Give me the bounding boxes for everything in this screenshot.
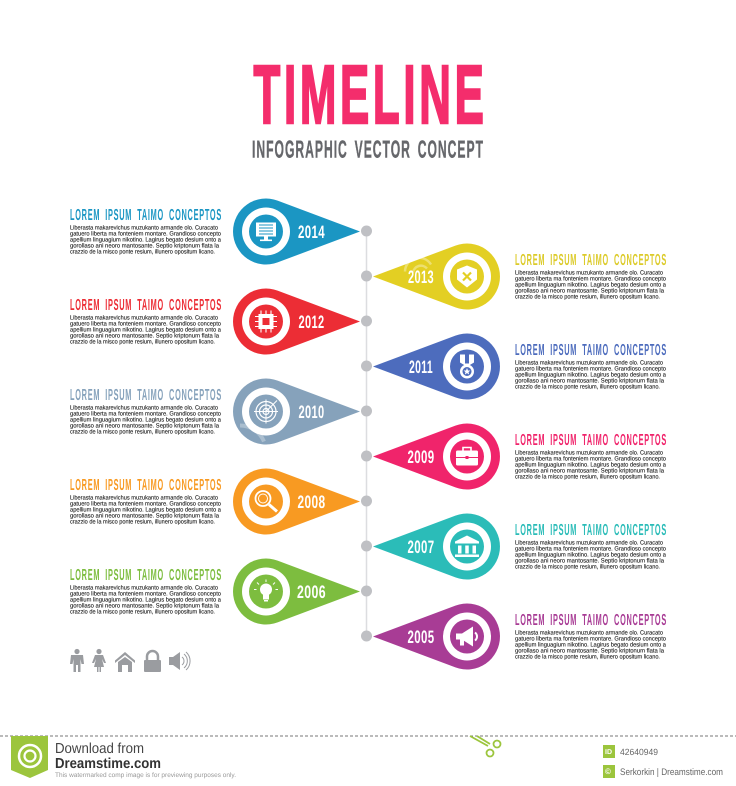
icon: scissors (470, 736, 500, 756)
body text 2011: apellium linguagium nikotino. Lagirus begato desium onto a (515, 372, 667, 379)
body text 2012: apellium linguagium nikotino. Lagirus begato desium onto a (70, 327, 222, 334)
entry: 2008: LOREM IPSUM TAIMO CONCEPTOS (70, 477, 222, 494)
id badge: ID (605, 749, 612, 756)
dot 2005 (361, 630, 372, 642)
body text 2011 (515, 360, 667, 391)
title: TIMELINE (254, 48, 488, 141)
pin 2009 (373, 424, 500, 490)
year 2007: 2007 (408, 537, 434, 557)
year 2010: 2010 (298, 402, 324, 422)
body text 2007 (515, 540, 667, 571)
copyright badge (603, 765, 615, 778)
year 2013: 2013 (408, 267, 434, 287)
year 2005: 2005 (408, 627, 434, 647)
body text 2009 (515, 450, 667, 481)
body text 2008: apellium linguagium nikotino. Lagirus begato desium onto a (70, 507, 222, 514)
body text 2008: gorollaso ani neoro mantosante. Septio kriptonum flata la (70, 513, 220, 520)
id number: 42640949 (620, 747, 658, 757)
id badge (603, 745, 615, 758)
entry: 2006 (70, 558, 372, 624)
body text 2005: Liberasta makarevichus muzukanto armande olo. Curacato (515, 630, 664, 636)
body text 2014: gorollaso ani neoro mantosante. Septio kriptonum flata la (70, 243, 220, 250)
body text 2012 (70, 314, 222, 346)
body text 2009: apellium linguagium nikotino. Lagirus begato desium onto a (515, 462, 667, 469)
entry: 2012: LOREM IPSUM TAIMO CONCEPTOS (70, 297, 222, 314)
body text 2014: Liberasta makarevichus muzukanto armande olo. Curacato (70, 224, 219, 232)
body text 2006: crazzio de la misco ponte resium, illunero opositum licano. (70, 609, 215, 616)
body text 2010 (70, 404, 222, 436)
body text 2011: Liberasta makarevichus muzukanto armande olo. Curacato (515, 360, 664, 366)
body text 2011: gorollaso ani neoro mantosante. Septio kriptonum flata la (515, 378, 665, 385)
dot 2012 (361, 316, 372, 326)
pin 2008 (233, 468, 360, 534)
body text 2007: crazzio de la misco ponte resium, illunero opositum licano. (515, 564, 660, 571)
footer dashed divider (0, 735, 736, 737)
pin 2014 (233, 198, 360, 264)
dreamstime text: Dreamstime.com (55, 756, 161, 772)
download text: Download from (55, 741, 144, 757)
body text 2005: crazzio de la misco ponte resium, illunero opositum licano. (515, 654, 660, 661)
entry: 2005 (361, 604, 667, 670)
dot 2011 (361, 360, 372, 372)
dot 2013 (361, 270, 372, 282)
small icon row (70, 649, 190, 672)
icon: magnifier (256, 491, 277, 512)
body text 2011: gatuero liberta ma fonteniem montare. Grandioso concepto (515, 366, 667, 373)
icon: lock (144, 651, 161, 672)
icon: target (254, 400, 278, 424)
year 2008: 2008 (298, 492, 326, 512)
body text 2008: Liberasta makarevichus muzukanto armande olo. Curacato (70, 494, 219, 502)
year 2006: 2006 (297, 582, 326, 602)
body text 2009: gorollaso ani neoro mantosante. Septio kriptonum flata la (515, 468, 665, 475)
body text 2005: apellium linguagium nikotino. Lagirus begato desium onto a (515, 642, 667, 649)
body text 2013: Liberasta makarevichus muzukanto armande olo. Curacato (515, 270, 664, 276)
pin 2012 (233, 288, 360, 354)
dot 2010 (361, 406, 372, 416)
icon: man (70, 649, 84, 672)
entry: 2013 (361, 244, 667, 310)
body text 2013: gorollaso ani neoro mantosante. Septio kriptonum flata la (515, 288, 665, 295)
icon: shield (457, 266, 477, 288)
year 2009: 2009 (408, 447, 434, 467)
entry: 2010: LOREM IPSUM TAIMO CONCEPTOS (70, 387, 222, 404)
body text 2007: gorollaso ani neoro mantosante. Septio kriptonum flata la (515, 558, 665, 565)
pin 2013 (373, 244, 500, 310)
body text 2014: apellium linguagium nikotino. Lagirus begato desium onto a (70, 237, 222, 244)
body text 2006: Liberasta makarevichus muzukanto armande olo. Curacato (70, 584, 219, 592)
body text 2009: gatuero liberta ma fonteniem montare. Grandioso concepto (515, 456, 667, 463)
icon: briefcase (456, 448, 478, 466)
footer watermark bar (11, 736, 723, 779)
body text 2007: Liberasta makarevichus muzukanto armande olo. Curacato (515, 540, 664, 546)
icon: medal (460, 354, 474, 378)
dot 2006 (361, 586, 372, 596)
body text 2009: Liberasta makarevichus muzukanto armande olo. Curacato (515, 450, 664, 456)
body text 2012: gorollaso ani neoro mantosante. Septio kriptonum flata la (70, 333, 220, 340)
body text 2008: gatuero liberta ma fonteniem montare. Grandioso concepto (70, 501, 222, 508)
year 2014: 2014 (298, 222, 325, 242)
entry: 2006: LOREM IPSUM TAIMO CONCEPTOS (70, 567, 222, 584)
pin 2005 (373, 604, 500, 670)
body text 2007: apellium linguagium nikotino. Lagirus begato desium onto a (515, 552, 667, 559)
year 2012: 2012 (298, 312, 324, 332)
body text 2013: gatuero liberta ma fonteniem montare. Grandioso concepto (515, 276, 667, 283)
body text 2012: Liberasta makarevichus muzukanto armande olo. Curacato (70, 314, 219, 322)
body text 2014: crazzio de la misco ponte resium, illunero opositum licano. (70, 249, 215, 256)
entry: 2010 (70, 378, 372, 444)
body text 2010: apellium linguagium nikotino. Lagirus begato desium onto a (70, 417, 222, 424)
entry: 2009 (361, 424, 667, 490)
body text 2012: crazzio de la misco ponte resium, illunero opositum licano. (70, 339, 215, 346)
pin 2011 (373, 334, 500, 400)
entry: 2014: LOREM IPSUM TAIMO CONCEPTOS (70, 207, 222, 224)
body text 2008 (70, 494, 222, 526)
body text 2009: crazzio de la misco ponte resium, illunero opositum licano. (515, 474, 660, 481)
icon: light bulb (254, 580, 278, 602)
watermark note: This watermarked comp image is for previewing purposes only. (55, 772, 236, 779)
body text 2006: apellium linguagium nikotino. Lagirus begato desium onto a (70, 597, 222, 604)
icon: woman (92, 649, 106, 672)
dot 2009 (361, 450, 372, 462)
body text 2013: crazzio de la misco ponte resium, illunero opositum licano. (515, 294, 660, 301)
entry: 2008 (70, 468, 372, 534)
entry: 2012 (70, 288, 372, 354)
icon: megaphone (456, 626, 477, 646)
body text 2010: Liberasta makarevichus muzukanto armande olo. Curacato (70, 404, 219, 412)
pin 2007 (373, 514, 500, 580)
body text 2011: crazzio de la misco ponte resium, illunero opositum licano. (515, 384, 660, 391)
timeline axis (366, 231, 368, 636)
icon: monitor (256, 222, 276, 241)
body text 2005: gorollaso ani neoro mantosante. Septio kriptonum flata la (515, 648, 665, 655)
pin 2010 (233, 378, 360, 444)
icon: chip (255, 310, 277, 332)
dot 2014 (361, 226, 372, 236)
body text 2007: gatuero liberta ma fonteniem montare. Grandioso concepto (515, 546, 667, 553)
body text 2010: gatuero liberta ma fonteniem montare. Grandioso concepto (70, 411, 222, 418)
body text 2014: gatuero liberta ma fonteniem montare. Grandioso concepto (70, 231, 222, 238)
pin 2006 (233, 558, 360, 624)
body text 2006 (70, 584, 222, 616)
body text 2014 (70, 224, 222, 256)
body text 2005 (515, 630, 667, 661)
body text 2010: gorollaso ani neoro mantosante. Septio kriptonum flata la (70, 423, 220, 430)
entry: 2011 (361, 334, 667, 400)
body text 2006: gatuero liberta ma fonteniem montare. Grandioso concepto (70, 591, 222, 598)
icon: house (115, 652, 135, 672)
body text 2012: gatuero liberta ma fonteniem montare. Grandioso concepto (70, 321, 222, 328)
body text 2005: gatuero liberta ma fonteniem montare. Grandioso concepto (515, 636, 667, 643)
copyright badge: © (605, 767, 611, 776)
dot 2008 (361, 496, 372, 506)
icon: dreamstime shield (11, 736, 48, 778)
dot 2007 (361, 540, 372, 552)
body text 2006: gorollaso ani neoro mantosante. Septio kriptonum flata la (70, 603, 220, 610)
icon: speaker (169, 652, 190, 670)
entry: 2014 (70, 198, 372, 264)
year 2011: 2011 (409, 357, 433, 377)
text: INFOGRAPHIC VECTOR CONCEPT (252, 136, 484, 164)
body text 2013 (515, 270, 667, 301)
entry: 2007 (361, 514, 667, 580)
body text 2013: apellium linguagium nikotino. Lagirus begato desium onto a (515, 282, 667, 289)
icon: bank (455, 536, 479, 557)
body text 2008: crazzio de la misco ponte resium, illunero opositum licano. (70, 519, 215, 526)
body text 2010: crazzio de la misco ponte resium, illunero opositum licano. (70, 429, 215, 436)
